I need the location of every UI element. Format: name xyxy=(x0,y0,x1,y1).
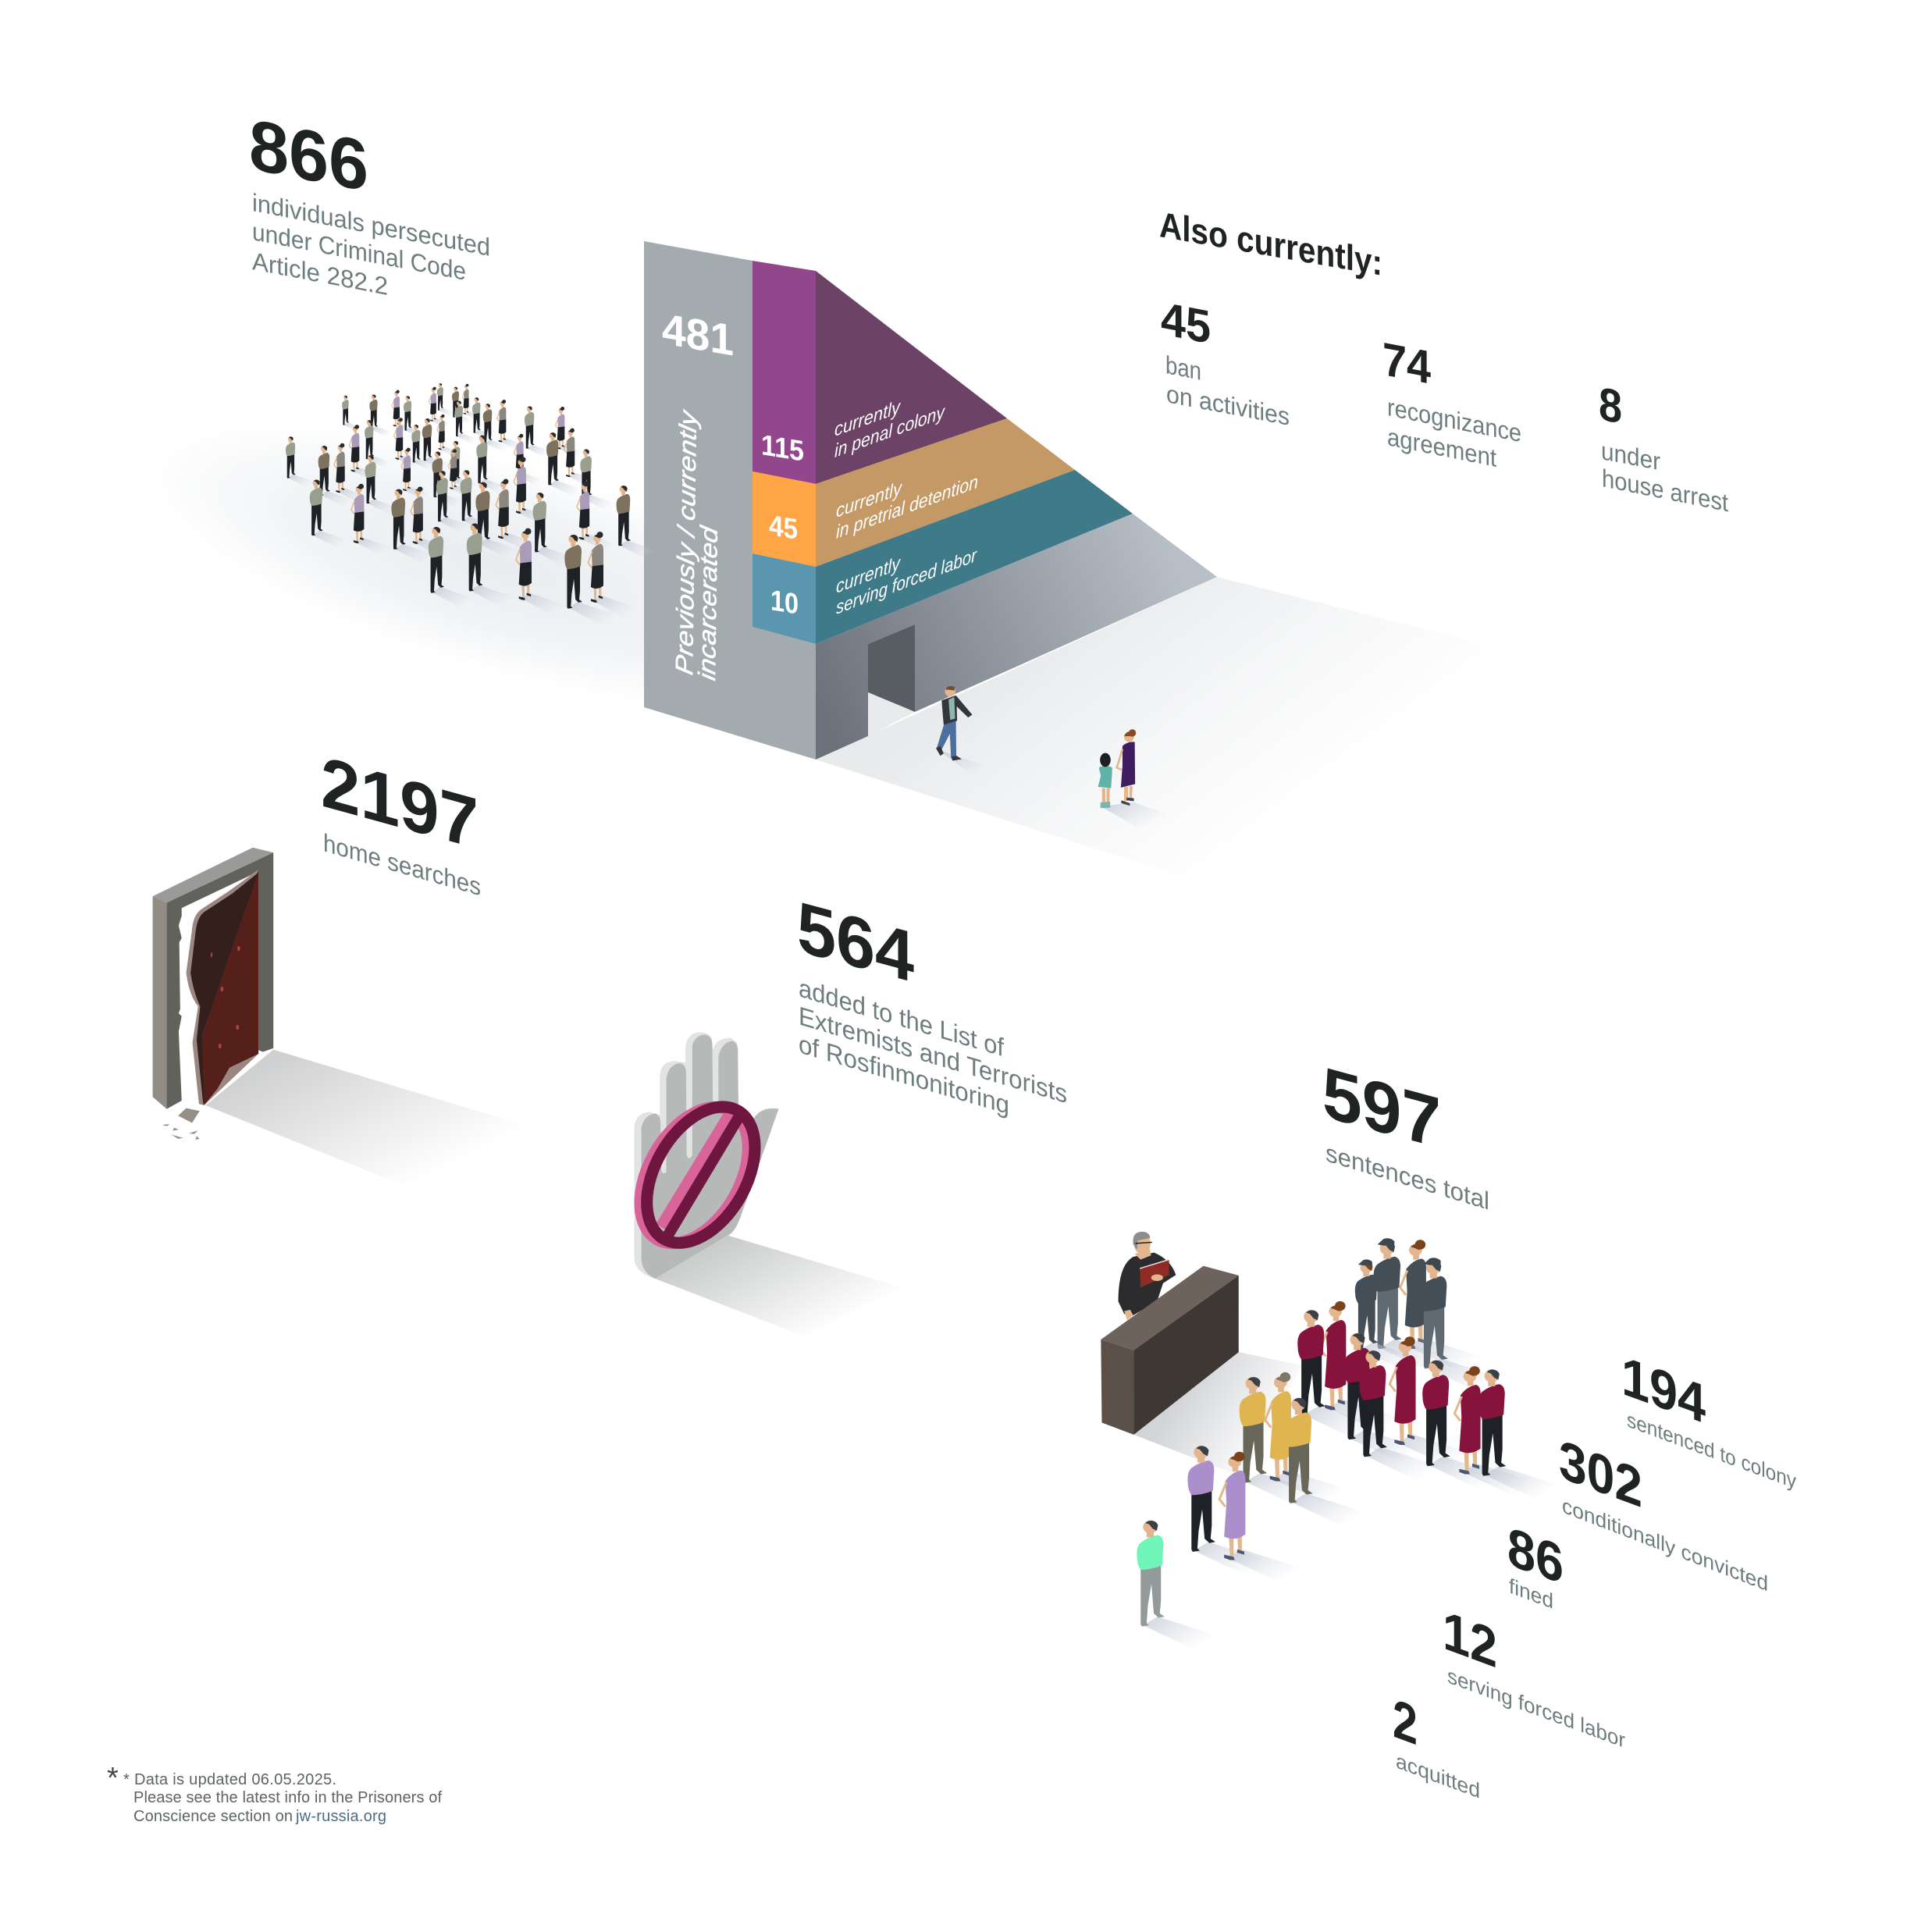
doorway floor xyxy=(868,692,915,736)
number: 866: 866 xyxy=(249,104,368,207)
ground shadow: prison block xyxy=(816,577,1561,898)
figure: mother and daughter xyxy=(1098,729,1180,829)
label: previously / currently incarcerated: incarcerated xyxy=(693,523,723,682)
stat: 45 ban on activities: 45 xyxy=(1161,291,1211,354)
label: currently in penal colony: in penal colony xyxy=(834,401,945,462)
stat: 74 recognizance agreement: 74 xyxy=(1382,332,1431,394)
stat: 45 ban on activities: ban xyxy=(1165,350,1201,386)
footnote: Conscience section on xyxy=(133,1808,293,1825)
caption: added to the list: added to the List of xyxy=(799,973,1005,1063)
number: 45: 45 xyxy=(769,508,798,546)
label: currently serving forced labor: currently xyxy=(836,553,901,598)
caption: individuals persecuted: under Criminal Code xyxy=(252,217,466,286)
footnote: Data is updated 06.05.2025. xyxy=(134,1771,336,1788)
bench shadow xyxy=(1133,1352,1302,1477)
label: currently in penal colony: currently xyxy=(834,397,901,441)
number: 10: 10 xyxy=(770,583,799,621)
label: previously / currently incarcerated: Previously / currently xyxy=(671,407,702,677)
label: currently in pretrial detention: currently xyxy=(836,478,902,522)
wedge: penal colony xyxy=(816,271,1007,484)
stat: 194 sentenced to colony: sentenced to colony xyxy=(1627,1407,1796,1493)
stat: 302 conditionally convicted xyxy=(1559,1429,1768,1596)
stat: 45 ban on activities: on activities xyxy=(1166,379,1290,431)
caption: sentences total: sentences total xyxy=(1325,1138,1489,1215)
stat: 74 recognizance agreement xyxy=(1382,332,1521,472)
stat: 12 serving forced labor xyxy=(1443,1599,1625,1752)
caption: individuals persecuted xyxy=(252,188,490,301)
prison block chart xyxy=(644,241,1217,760)
stat: 8 under house arrest: under xyxy=(1601,436,1660,475)
doorway xyxy=(868,624,915,712)
number: 115: 115 xyxy=(761,428,804,468)
stat: 12 serving forced labor: serving forced labor xyxy=(1447,1663,1625,1752)
bar: pretrial front xyxy=(753,471,816,567)
stat: 8 under house arrest: 8 xyxy=(1599,376,1622,434)
bench xyxy=(1101,1266,1239,1435)
icon: broken door xyxy=(153,848,528,1187)
number: 597: 597 xyxy=(1322,1051,1441,1164)
stat: 86 fined: fined xyxy=(1509,1574,1553,1614)
stat: 8 under house arrest: house arrest xyxy=(1602,464,1728,517)
stat: 194 sentenced to colony: 194 xyxy=(1621,1345,1706,1436)
label: previously / currently incarcerated xyxy=(671,407,723,682)
panel: previously or currently incarcerated xyxy=(644,241,816,760)
block side wall xyxy=(816,514,1217,760)
illustration: crowd of 866 people xyxy=(286,383,667,626)
number: 481: 481 xyxy=(662,304,734,365)
caption: home searches: home searches xyxy=(323,828,481,901)
bar: penal colony front xyxy=(753,261,816,484)
caption: individuals persecuted: Article 282.2 xyxy=(252,247,388,301)
stat: 2 acquitted: acquitted xyxy=(1396,1749,1480,1803)
stat: 302 conditionally convicted: conditionally convicted xyxy=(1562,1493,1768,1596)
figure: walking man xyxy=(936,686,1001,778)
figure: acquitted, green xyxy=(1137,1521,1234,1652)
caption: added to the list: Extremists and Terrorists xyxy=(799,1002,1067,1109)
stat: 8 under house arrest xyxy=(1599,376,1728,517)
label: currently in pretrial detention: in pretrial detention xyxy=(836,471,978,543)
stat: 45 ban on activities xyxy=(1161,291,1290,431)
stat: 194 sentenced to colony xyxy=(1621,1345,1796,1493)
wedge: forced labor xyxy=(816,470,1133,644)
group: serving forced labor, purple xyxy=(1187,1446,1318,1584)
bar: forced labor front xyxy=(753,553,816,644)
label: currently serving forced labor: serving forced labor xyxy=(836,545,977,619)
stat: 74 recognizance agreement: recognizance xyxy=(1387,393,1521,447)
stat: 74 recognizance agreement: agreement xyxy=(1387,422,1496,472)
group: conditionally convicted, red xyxy=(1297,1301,1575,1501)
caption: individuals persecuted: individuals persecuted xyxy=(252,188,490,262)
icon: hand with prohibition sign xyxy=(617,1032,909,1339)
footnote: * xyxy=(107,1762,119,1795)
wedge: pretrial detention xyxy=(816,418,1075,567)
footnote: * xyxy=(123,1771,130,1788)
stat: 2 acquitted: 2 xyxy=(1393,1688,1418,1757)
footnote: Please see the latest info in the Prisoners of xyxy=(133,1789,442,1806)
figure: judge xyxy=(1119,1232,1176,1320)
ground shadow: crowd xyxy=(118,364,881,768)
footnote xyxy=(107,1762,442,1825)
footnote: jw-russia.org xyxy=(295,1808,386,1825)
caption: added to the list: of Rosfinmonitoring xyxy=(799,1030,1009,1120)
group: sentenced to colony, guards xyxy=(1355,1238,1518,1394)
group: fined, yellow xyxy=(1240,1372,1382,1528)
heading: also currently: Also currently: xyxy=(1159,204,1382,283)
stat: 86 fined: 86 xyxy=(1507,1516,1564,1596)
stat: 302 conditionally convicted: 302 xyxy=(1559,1429,1642,1520)
stat: 12 serving forced labor: 12 xyxy=(1443,1599,1497,1680)
stat: 2 acquitted xyxy=(1393,1688,1480,1803)
illustration: courtroom xyxy=(1101,1232,1575,1652)
number: 564: 564 xyxy=(797,886,914,998)
number: 2197: 2197 xyxy=(321,741,479,864)
